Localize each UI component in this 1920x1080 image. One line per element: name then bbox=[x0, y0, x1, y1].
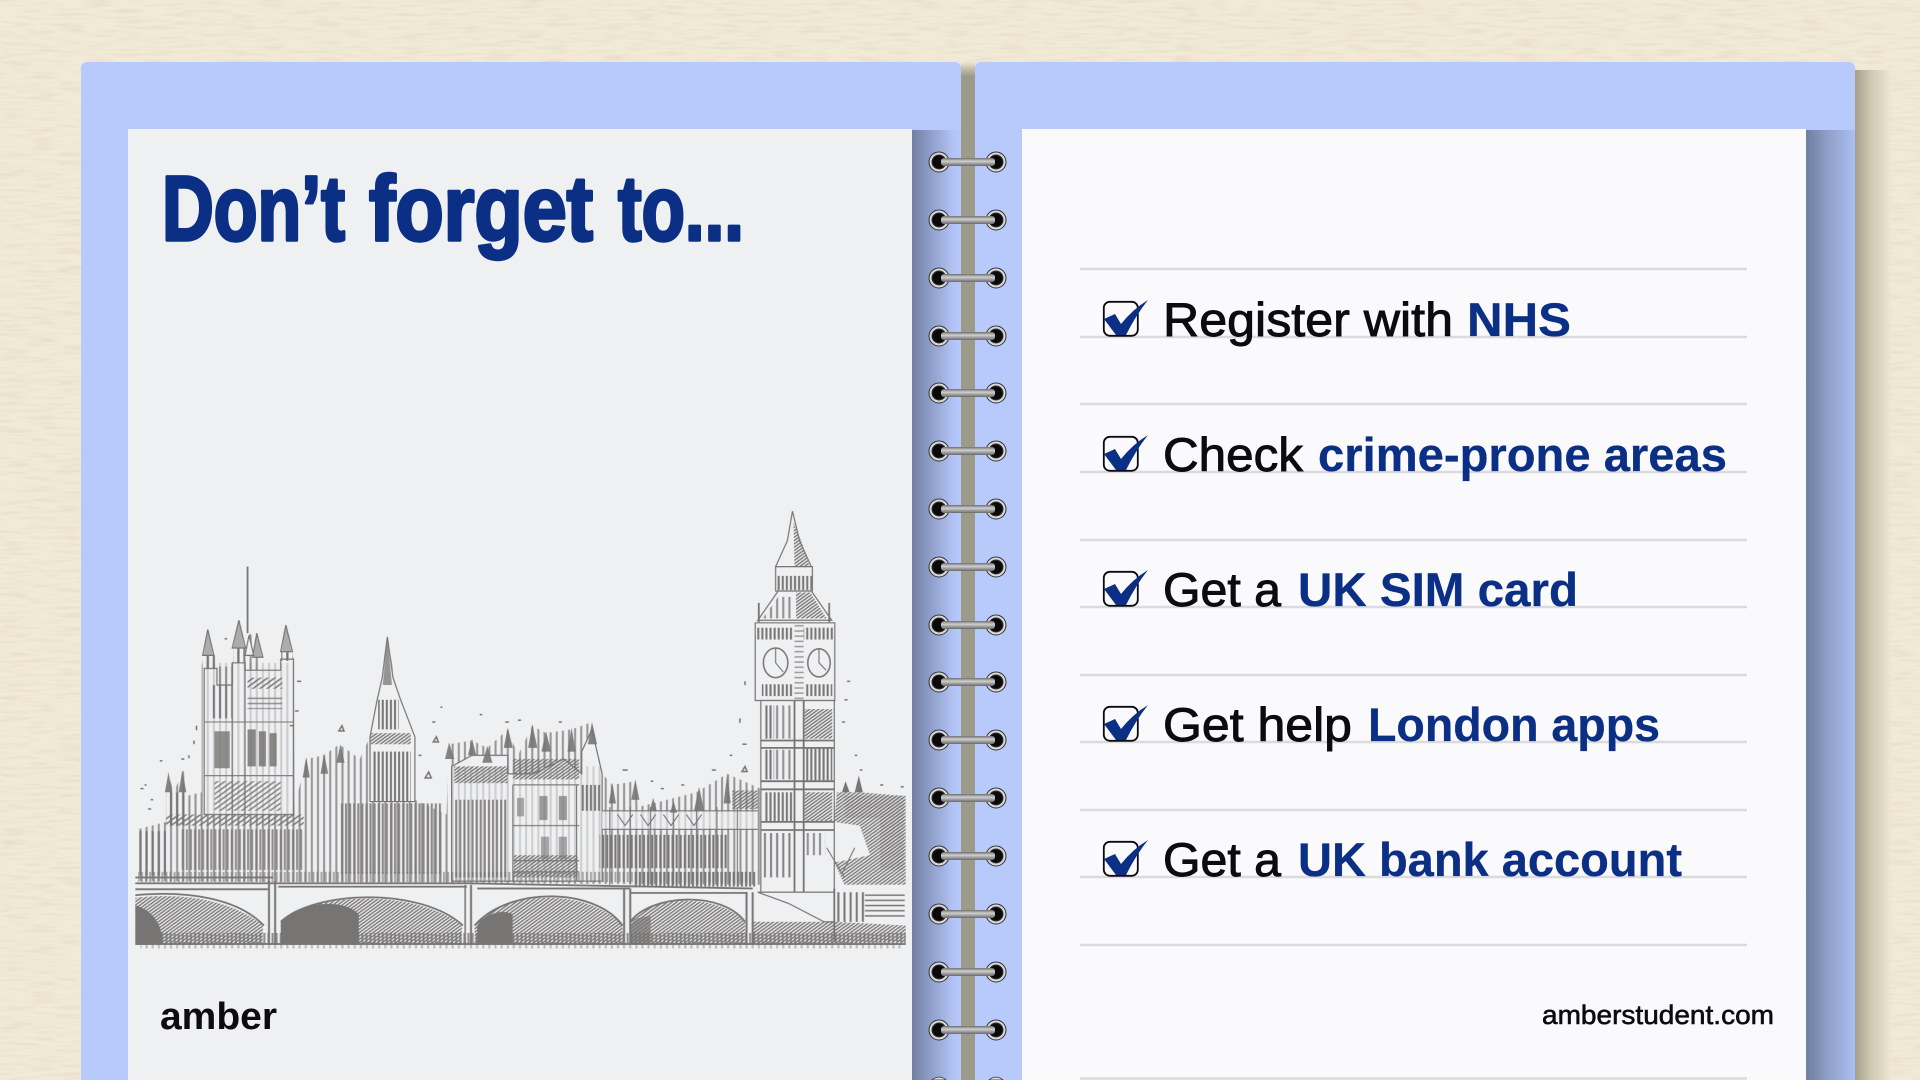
list item: Check crime-prone areas bbox=[1104, 428, 1727, 481]
title: forget bbox=[369, 158, 593, 260]
list item: Get a UK SIM card bbox=[1104, 563, 1578, 616]
central palace block bbox=[452, 729, 602, 881]
arches hatching bbox=[135, 896, 263, 944]
icon: checkbox bbox=[1104, 840, 1148, 876]
list item: Get a UK bank account bbox=[1104, 833, 1682, 886]
waterline bbox=[135, 933, 906, 944]
panel: right paper page bbox=[1022, 129, 1806, 1080]
long gallery bbox=[602, 811, 755, 829]
balustrade and bridge bbox=[138, 872, 750, 882]
title: to... bbox=[618, 158, 744, 260]
illustration: Westminster skyline sketch bbox=[135, 511, 906, 948]
panel: left notebook cover bbox=[81, 62, 961, 1080]
panel: right notebook cover bbox=[975, 62, 1855, 1080]
spiral binding rings bbox=[929, 152, 1006, 1080]
icon: checkbox bbox=[1104, 570, 1148, 606]
list item: Get a UK SIM card: Get a bbox=[1163, 563, 1282, 616]
drop shadow of notebook bbox=[1855, 70, 1895, 1080]
icon: checkbox bbox=[1104, 435, 1148, 471]
dark arch shadows bbox=[135, 905, 162, 944]
logo: amber: amber bbox=[160, 996, 277, 1038]
icon: checkbox bbox=[1104, 705, 1148, 741]
Victoria tower bbox=[204, 659, 293, 814]
list item: Check crime-prone areas: Check bbox=[1163, 428, 1304, 481]
title: Don’t bbox=[162, 158, 345, 260]
main palace silhouette bbox=[138, 620, 760, 885]
list item: Check crime-prone areas: crime-prone areas bbox=[1318, 428, 1727, 481]
list item: Get help London apps: London apps bbox=[1368, 698, 1660, 751]
list item: Get help London apps bbox=[1104, 698, 1660, 751]
Big Ben bbox=[755, 511, 835, 893]
list item: Get a UK SIM card: UK SIM card bbox=[1298, 563, 1578, 616]
panel: left paper page bbox=[128, 129, 912, 1080]
spine gap bbox=[961, 62, 975, 1080]
speckles bbox=[140, 639, 904, 809]
list item: Register with NHS: NHS bbox=[1467, 293, 1571, 346]
list item: Get a UK bank account: Get a bbox=[1163, 833, 1282, 886]
title bbox=[162, 158, 744, 260]
list item: Register with NHS bbox=[1104, 293, 1571, 346]
website url: amberstudent.com bbox=[1542, 1000, 1774, 1030]
left fringe columns bbox=[138, 831, 166, 876]
Victoria tower pinnacles bbox=[203, 620, 292, 657]
trees bbox=[834, 792, 906, 885]
pinnacles row bbox=[165, 722, 731, 813]
steps and embankment bbox=[758, 892, 834, 922]
left low block hatching bbox=[166, 814, 304, 826]
ruled lines bbox=[1080, 269, 1747, 1078]
list item: Register with NHS: Register with bbox=[1163, 293, 1453, 346]
central spire tower bbox=[370, 637, 415, 802]
list item: Get help London apps: Get help bbox=[1163, 698, 1352, 751]
list item: Get a UK bank account: UK bank account bbox=[1298, 833, 1682, 886]
icon: checkbox bbox=[1104, 300, 1148, 336]
